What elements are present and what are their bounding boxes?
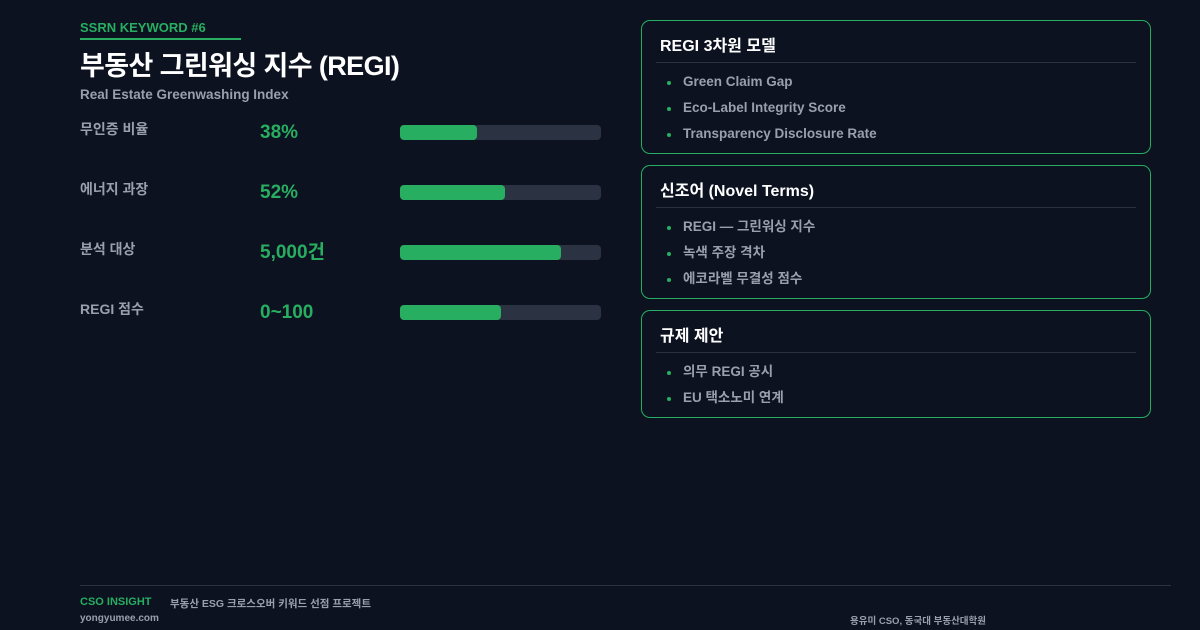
panel: 신조어: 신조어 (Novel Terms) xyxy=(660,183,814,200)
metric: 무인증 비율 xyxy=(80,121,601,143)
panel: 신조어: REGI — 그린워싱 지수 xyxy=(683,219,815,234)
panel: 규제 제안: 규제 제안 xyxy=(660,328,723,345)
title: 부동산 그린워싱 지수 (REGI) xyxy=(80,51,399,81)
metric: 무인증 비율: 무인증 비율 xyxy=(80,121,148,137)
panel: 신조어: 에코라벨 무결성 점수 xyxy=(683,271,802,286)
metric: 에너지 과장: 에너지 과장 xyxy=(80,181,148,197)
panel: REGI 3차원 모델 xyxy=(641,20,1151,154)
metric: 에너지 과장: 52% xyxy=(260,182,298,203)
metric: REGI 점수 xyxy=(80,301,601,323)
panel: REGI 3차원 모델: Transparency Disclosure Rate xyxy=(683,126,877,141)
panel: 규제 제안: EU 택소노미 연계 xyxy=(683,390,784,405)
kicker xyxy=(80,20,241,40)
panel: 신조어 xyxy=(641,165,1151,299)
footer xyxy=(80,585,1171,630)
metric: 에너지 과장 xyxy=(80,181,601,203)
panel: 규제 제안 xyxy=(641,310,1151,418)
panel: 신조어: 녹색 주장 격차 xyxy=(683,245,765,260)
panel: REGI 3차원 모델: REGI 3차원 모델 xyxy=(660,38,776,55)
footer: 부동산 ESG 크로스오버 키워드 선점 프로젝트 xyxy=(170,598,371,610)
metric: REGI 점수: 0~100 xyxy=(260,302,313,323)
footer: yongyumee.com xyxy=(80,613,159,624)
metric: 분석 대상: 5,000건 xyxy=(260,242,325,263)
kicker: SSRN KEYWORD #6 xyxy=(80,20,206,35)
panel: REGI 3차원 모델: Eco-Label Integrity Score xyxy=(683,100,846,115)
footer: CSO INSIGHT xyxy=(80,596,152,608)
metric: REGI 점수: REGI 점수 xyxy=(80,301,144,317)
footer: 용유미 CSO, 동국대 부동산대학원 xyxy=(850,616,986,627)
panel: 규제 제안: 의무 REGI 공시 xyxy=(683,364,773,379)
metric: 분석 대상: 분석 대상 xyxy=(80,241,135,257)
metric: 무인증 비율: 38% xyxy=(260,122,298,143)
subtitle: Real Estate Greenwashing Index xyxy=(80,87,289,102)
metric: 분석 대상 xyxy=(80,241,601,263)
panel: REGI 3차원 모델: Green Claim Gap xyxy=(683,74,793,89)
